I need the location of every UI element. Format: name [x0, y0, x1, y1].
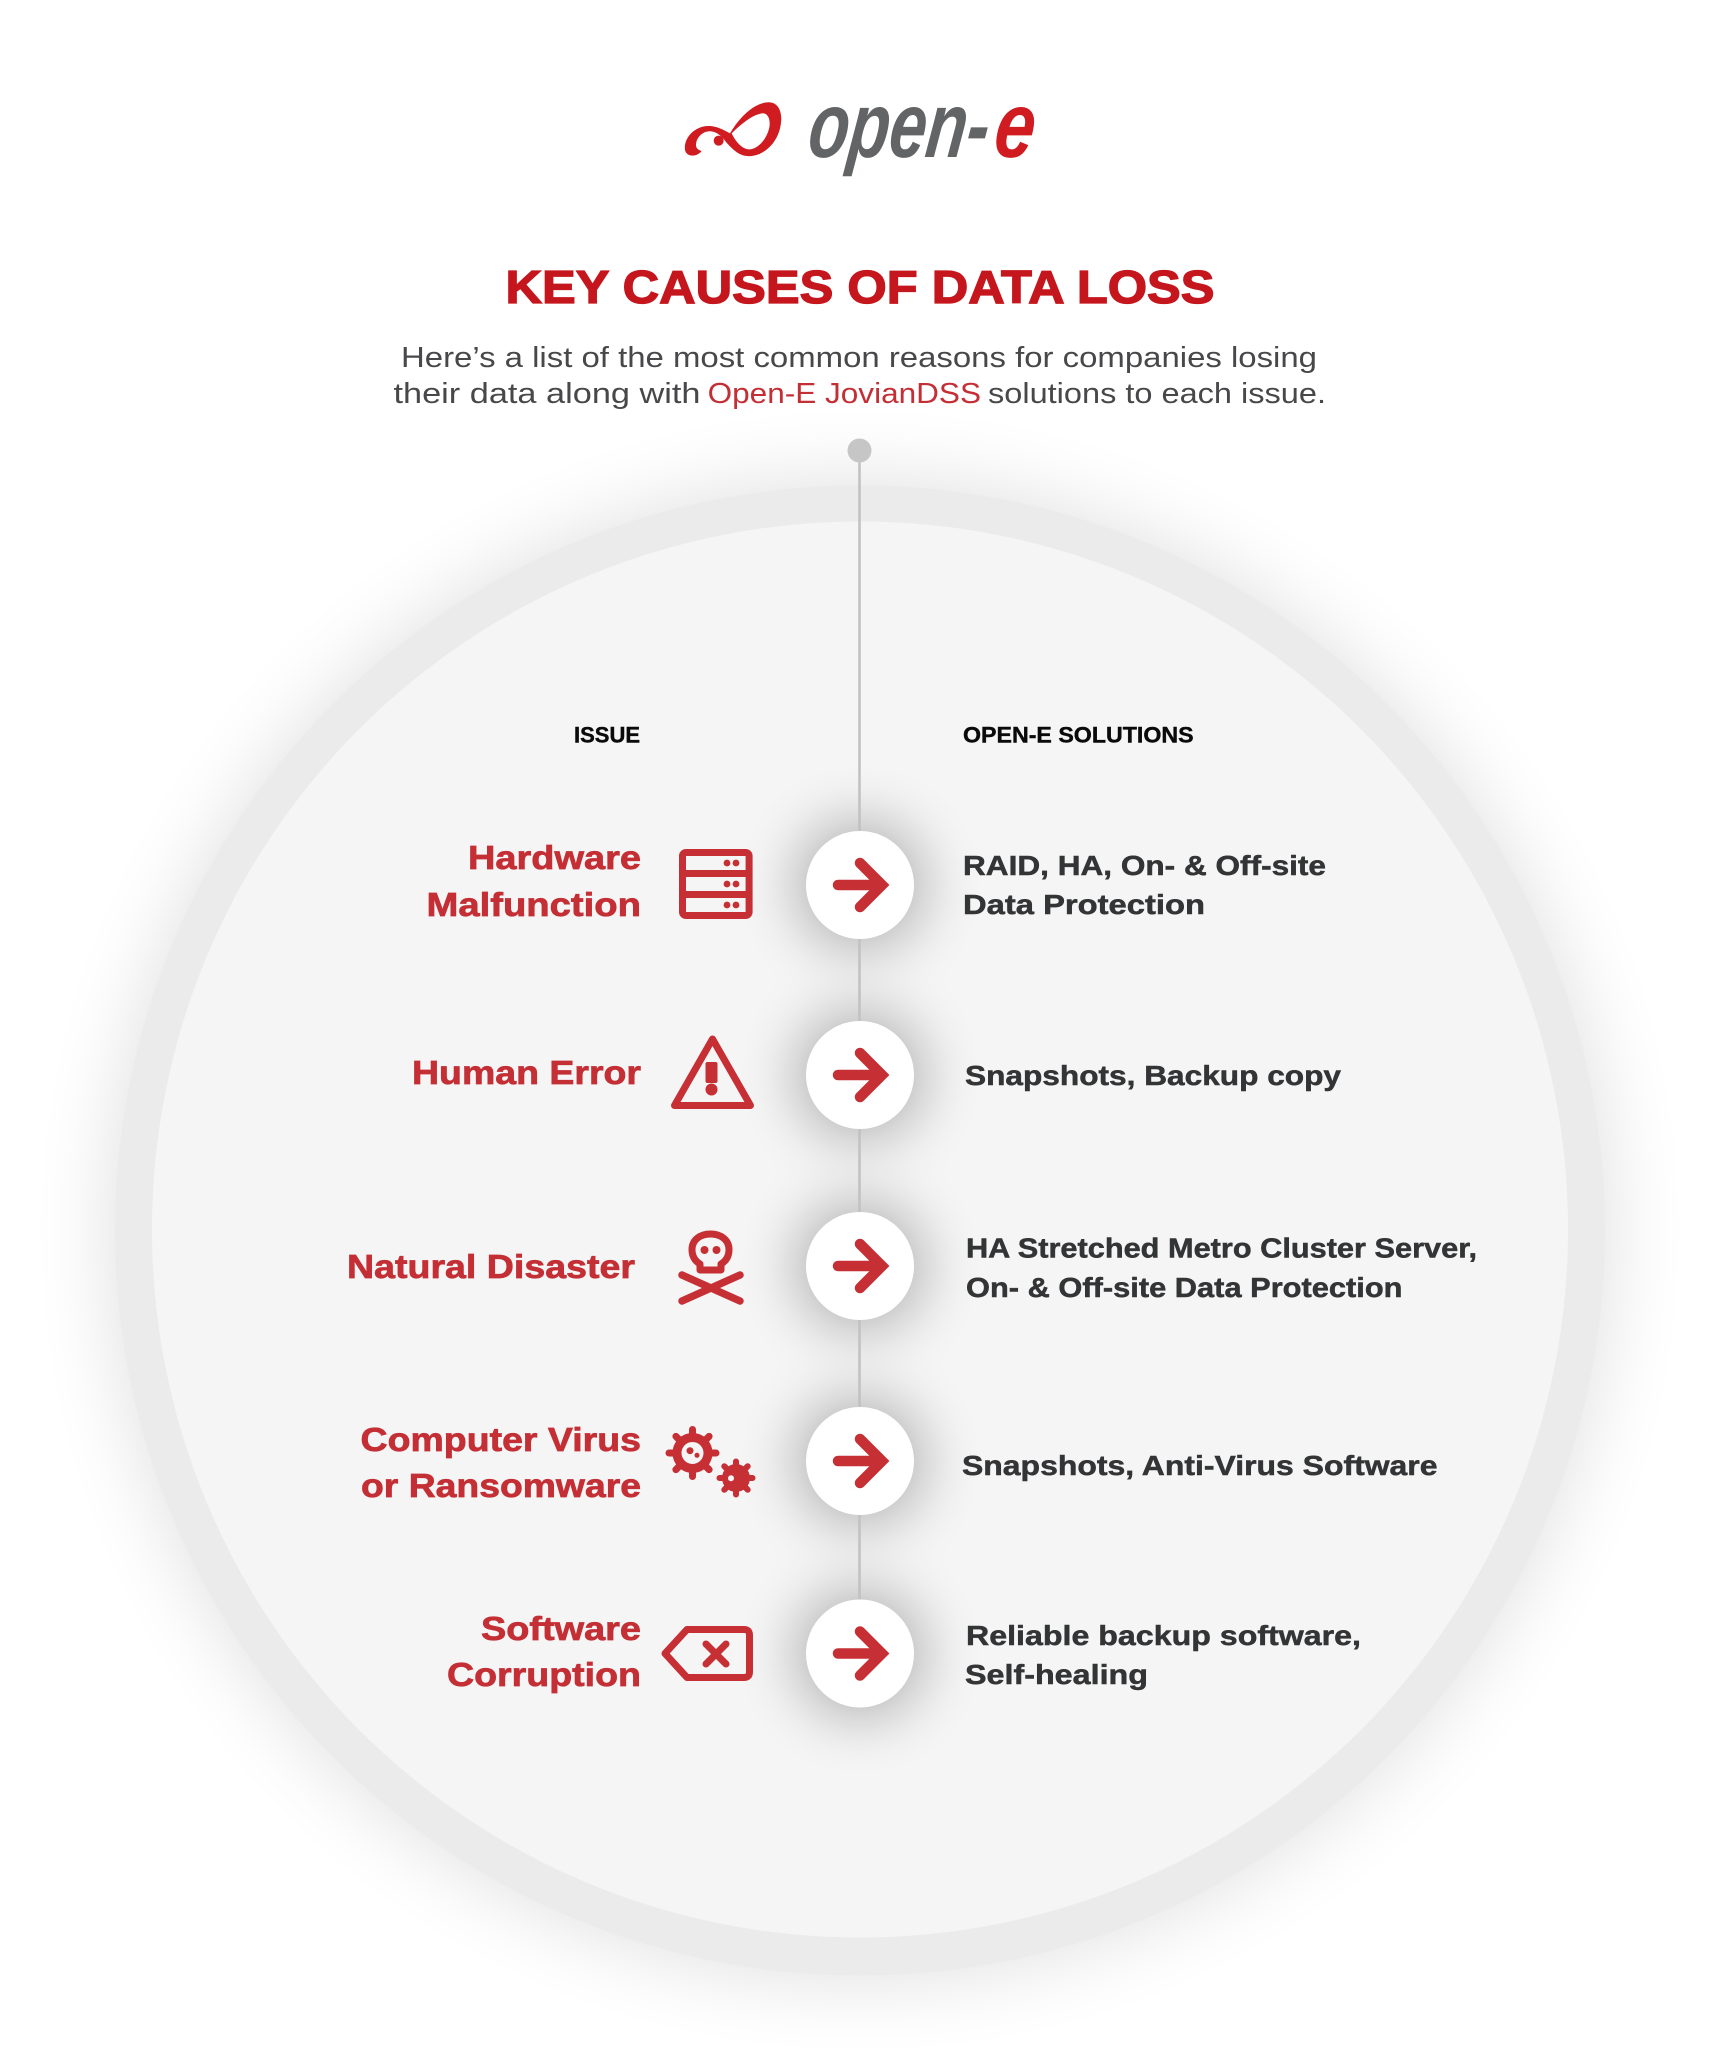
icon: infinity mark — [685, 102, 781, 156]
solution text: Reliable backup software, — [966, 1620, 1361, 1651]
icon: virus gears — [669, 1430, 752, 1494]
icon: delete tag — [665, 1630, 750, 1678]
row: computer virus or ransomware — [360, 1407, 1438, 1515]
title: KEY CAUSES OF DATA LOSS — [506, 261, 1214, 313]
icon: server — [682, 852, 749, 916]
solution text: RAID, HA, On- & Off-site — [963, 850, 1326, 881]
badge shadows — [798, 823, 922, 1716]
subtitle: Open-E JovianDSS — [708, 378, 981, 410]
subtitle: Here’s a list of the most common reasons for companies losing — [401, 342, 1317, 374]
row: software corruption — [447, 1600, 1361, 1708]
arrow badge — [806, 1021, 914, 1129]
subtitle — [394, 342, 1326, 410]
arrow badge — [806, 1212, 914, 1320]
row: natural disaster — [347, 1212, 1477, 1320]
issue label — [360, 1421, 641, 1504]
row: human error — [412, 1021, 1341, 1129]
panel: inner circle — [152, 522, 1568, 1938]
solution text: On- & Off-site Data Protection — [966, 1272, 1402, 1303]
issue label: Computer Virus — [360, 1421, 641, 1458]
row: hardware malfunction — [426, 831, 1326, 939]
subtitle: solutions to each issue. — [988, 378, 1326, 410]
arrow badge — [806, 1407, 914, 1515]
arrow badge — [806, 831, 914, 939]
solution text: HA Stretched Metro Cluster Server, — [966, 1233, 1477, 1264]
solution text — [966, 1233, 1477, 1303]
solution text — [965, 1620, 1361, 1690]
arrow badge — [806, 1600, 914, 1708]
issue label: Software — [481, 1610, 641, 1647]
issue label — [426, 839, 641, 923]
column heading: issue: ISSUE — [574, 723, 640, 748]
issue label: Corruption — [447, 1656, 641, 1693]
solution text: Self-healing — [965, 1659, 1148, 1690]
logo: open-e — [685, 73, 1042, 177]
icon: warning triangle — [674, 1039, 750, 1106]
issue label: or Ransomware — [361, 1467, 641, 1504]
solution text: Data Protection — [963, 889, 1205, 920]
issue label: Malfunction — [426, 886, 641, 923]
issue label: Hardware — [468, 839, 641, 876]
logo wordmark: open- — [804, 73, 996, 177]
icon: skull and crossbones — [682, 1234, 740, 1301]
panel: outer glow and ring — [115, 486, 1605, 1976]
logo wordmark: e — [990, 73, 1042, 177]
issue label: Human Error — [412, 1054, 641, 1091]
issue label: Natural Disaster — [347, 1248, 635, 1285]
subtitle: their data along with — [394, 378, 700, 410]
solution text: Snapshots, Backup copy — [965, 1060, 1341, 1091]
column heading: open-e solutions: OPEN-E SOLUTIONS — [963, 723, 1194, 748]
solution text — [963, 850, 1326, 920]
issue label — [447, 1610, 641, 1693]
solution text: Snapshots, Anti-Virus Software — [962, 1450, 1438, 1481]
timeline connector — [848, 438, 872, 1650]
